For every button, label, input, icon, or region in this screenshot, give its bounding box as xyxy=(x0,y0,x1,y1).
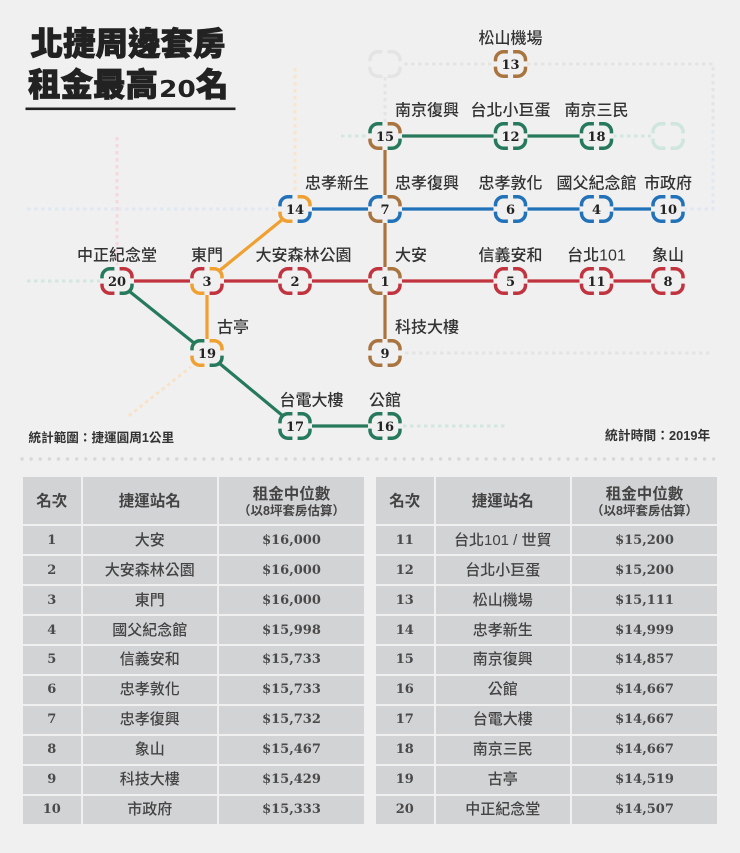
station 14: 忠孝新生 xyxy=(305,174,369,192)
table: ranks 11-20: $15,200 xyxy=(615,532,674,548)
station 8 xyxy=(652,246,684,293)
header: station: 捷運站名 xyxy=(472,493,534,510)
table: ranks 11-20: 台電大樓 xyxy=(473,711,533,728)
station 15: 南京復興 xyxy=(395,100,459,120)
table: ranks 1-10: 大安森林公園 xyxy=(105,562,195,578)
table: ranks 11-20: $14,667 xyxy=(615,682,674,697)
header: rent xyxy=(572,477,717,524)
station 20: 20 xyxy=(108,275,126,290)
station 19 xyxy=(192,318,249,365)
table: ranks 1-10: $15,998 xyxy=(262,622,321,638)
title: 租金最高 xyxy=(28,66,158,103)
station 16: 16 xyxy=(376,420,394,435)
header: rent: 租金中位數 xyxy=(606,486,683,502)
table: ranks 11-20: 20 xyxy=(396,802,414,817)
station 16: 公館 xyxy=(369,390,401,410)
table: ranks 11-20: 台北小巨蛋 xyxy=(465,562,540,578)
table: ranks 1-10: $16,000 xyxy=(262,562,321,578)
table: ranks 1-10: $15,732 xyxy=(262,712,321,727)
ghost station right xyxy=(653,124,683,148)
station 4: 4 xyxy=(592,203,601,218)
station 20: 中正紀念堂 xyxy=(77,246,157,264)
station 3: 3 xyxy=(202,275,212,290)
table: ranks 1-10: 象山 xyxy=(135,741,165,758)
station 18: 南京三民 xyxy=(564,100,629,120)
station 14: 14 xyxy=(286,203,304,218)
station 15: 15 xyxy=(376,130,394,145)
title: 20 xyxy=(159,76,196,103)
table: ranks 11-20: $14,999 xyxy=(615,622,674,638)
table: ranks 11-20: 南京三民 xyxy=(473,741,533,758)
table: ranks 1-10: 8 xyxy=(47,742,56,757)
station 9: 科技大樓 xyxy=(395,318,459,336)
table: ranks 1-10: 大安 xyxy=(135,532,165,548)
station 17: 台電大樓 xyxy=(279,390,344,410)
station 11 xyxy=(567,246,626,293)
station 3 xyxy=(191,246,223,293)
table: ranks 1-10: 忠孝復興 xyxy=(120,711,180,728)
title: 北捷周邊套房 xyxy=(30,26,226,62)
table: ranks 1-10 xyxy=(23,477,364,824)
station 4: 國父紀念館 xyxy=(556,174,637,192)
station 12: 台北小巨蛋 xyxy=(470,100,551,120)
station 12 xyxy=(470,100,551,148)
station 13: 13 xyxy=(501,58,520,73)
table: ranks 1-10: 7 xyxy=(47,712,56,727)
table: ranks 1-10: $15,467 xyxy=(262,742,321,757)
table: ranks 11-20: $15,200 xyxy=(615,562,674,578)
header: rank xyxy=(23,477,80,524)
station 7 xyxy=(370,174,459,221)
header: rank xyxy=(376,477,434,524)
station 8: 8 xyxy=(663,275,673,290)
station 17: 17 xyxy=(286,420,304,435)
ghost station top left xyxy=(370,52,400,76)
station 10: 10 xyxy=(659,203,677,218)
station 2: 2 xyxy=(290,275,300,290)
table: ranks 1-10: 3 xyxy=(47,592,56,608)
header: rank: 名次 xyxy=(36,493,67,510)
station 18: 18 xyxy=(587,130,606,145)
station 5 xyxy=(478,246,543,293)
station 5: 信義安和 xyxy=(478,246,543,264)
station 10 xyxy=(644,174,692,221)
station 16 xyxy=(369,390,401,438)
table: ranks 11-20: $14,507 xyxy=(615,802,674,817)
station 6: 忠孝敦化 xyxy=(478,174,543,192)
table: ranks 1-10: 9 xyxy=(47,772,56,787)
station 15 xyxy=(370,100,459,148)
table: ranks 1-10: 忠孝敦化 xyxy=(120,681,180,698)
table: ranks 1-10: $15,733 xyxy=(262,652,321,667)
faint dotted extension lines xyxy=(27,64,713,426)
station 9 xyxy=(370,318,459,365)
station 2: 大安森林公園 xyxy=(255,246,352,264)
header: rank: 名次 xyxy=(389,493,420,510)
station 12: 12 xyxy=(501,130,520,145)
table: ranks 1-10: 4 xyxy=(47,622,56,638)
station 11: 11 xyxy=(587,275,606,290)
station 6 xyxy=(478,174,543,221)
station 9: 9 xyxy=(380,347,390,362)
metro lines xyxy=(117,136,668,426)
table: ranks 11-20: 14 xyxy=(396,622,414,638)
header: station: 捷運站名 xyxy=(119,493,181,510)
metro map xyxy=(20,26,716,461)
station 19: 19 xyxy=(198,347,216,362)
station 7: 7 xyxy=(380,203,390,218)
table: ranks 1-10: 10 xyxy=(43,802,61,817)
table: ranks 1-10: 6 xyxy=(47,682,56,697)
table: ranks 1-10: 2 xyxy=(47,562,56,578)
table: ranks 1-10: 信義安和 xyxy=(120,651,180,668)
table: ranks 11-20: 公館 xyxy=(488,681,518,698)
header: station xyxy=(436,477,570,524)
table: ranks 1-10: $15,429 xyxy=(262,772,321,787)
station 13 xyxy=(478,30,543,76)
table: ranks 11-20: 18 xyxy=(396,742,414,757)
header: rent: （以8坪套房估算） xyxy=(591,504,698,518)
station 20 xyxy=(77,246,157,293)
title: 名 xyxy=(196,67,229,103)
diagonal metro lines xyxy=(129,219,283,416)
table: ranks 11-20: 南京復興 xyxy=(473,651,533,668)
table: ranks 1-10: $16,000 xyxy=(262,532,321,548)
table: ranks 11-20: $14,667 xyxy=(615,712,674,727)
table: ranks 11-20: 12 xyxy=(396,562,414,578)
table: ranks 11-20: 19 xyxy=(396,772,414,787)
note: coverage: 統計範圍：捷運圓周1公里 xyxy=(28,430,174,445)
station 18 xyxy=(564,100,629,148)
table: ranks 11-20: 中正紀念堂 xyxy=(465,801,540,818)
table: ranks 11-20: $14,857 xyxy=(615,652,674,667)
title xyxy=(26,26,236,110)
station 5: 5 xyxy=(506,275,515,290)
table: ranks 1-10: $15,333 xyxy=(262,802,321,817)
table: ranks 1-10: 5 xyxy=(47,652,56,667)
table: ranks 11-20: $14,667 xyxy=(615,742,674,757)
table: ranks 1-10: $15,733 xyxy=(262,682,321,697)
station 11: 台北101 xyxy=(567,246,626,264)
header: rent: （以8坪套房估算） xyxy=(238,504,345,518)
table: ranks 11-20: 11 xyxy=(396,532,414,548)
header: rent xyxy=(219,477,364,524)
table: ranks 11-20: 松山機場 xyxy=(473,592,533,608)
station 19: 古亭 xyxy=(217,318,249,336)
station 13: 松山機場 xyxy=(478,30,543,48)
table: ranks 11-20: 16 xyxy=(396,682,414,697)
station 8: 象山 xyxy=(652,246,684,264)
table: ranks 1-10: 市政府 xyxy=(127,801,172,818)
table: ranks 11-20: 台北101 / 世貿 xyxy=(454,532,552,548)
station 10: 市政府 xyxy=(644,174,692,192)
table: ranks 11-20 xyxy=(376,477,717,824)
header: station xyxy=(82,477,217,524)
station 1 xyxy=(370,246,427,293)
table: ranks 11-20: 13 xyxy=(396,592,414,608)
table: ranks 11-20: 古亭 xyxy=(488,771,518,788)
station 17 xyxy=(279,390,344,438)
table: ranks 11-20: 17 xyxy=(396,712,414,727)
station 2 xyxy=(255,246,352,293)
station 1: 1 xyxy=(380,275,390,290)
header: rent: 租金中位數 xyxy=(253,486,330,502)
station 3: 東門 xyxy=(191,246,223,264)
station 6: 6 xyxy=(506,203,515,218)
table: ranks 11-20: 忠孝新生 xyxy=(473,622,533,638)
table: ranks 1-10: 1 xyxy=(47,532,56,548)
station 1: 大安 xyxy=(395,246,427,264)
table: ranks 11-20: $14,519 xyxy=(615,772,674,787)
station 7: 忠孝復興 xyxy=(395,174,459,192)
table: ranks 1-10: 國父紀念館 xyxy=(112,622,187,638)
note: year: 統計時間：2019年 xyxy=(605,428,710,443)
table: ranks 11-20: 15 xyxy=(396,652,414,667)
table: ranks 1-10: $16,000 xyxy=(262,592,321,608)
station 4 xyxy=(556,174,637,221)
table: ranks 1-10: 東門 xyxy=(135,592,165,608)
table: ranks 11-20: $15,111 xyxy=(615,592,674,608)
station 14 xyxy=(280,174,369,221)
table: ranks 1-10: 科技大樓 xyxy=(120,771,180,788)
station backgrounds xyxy=(100,122,685,440)
